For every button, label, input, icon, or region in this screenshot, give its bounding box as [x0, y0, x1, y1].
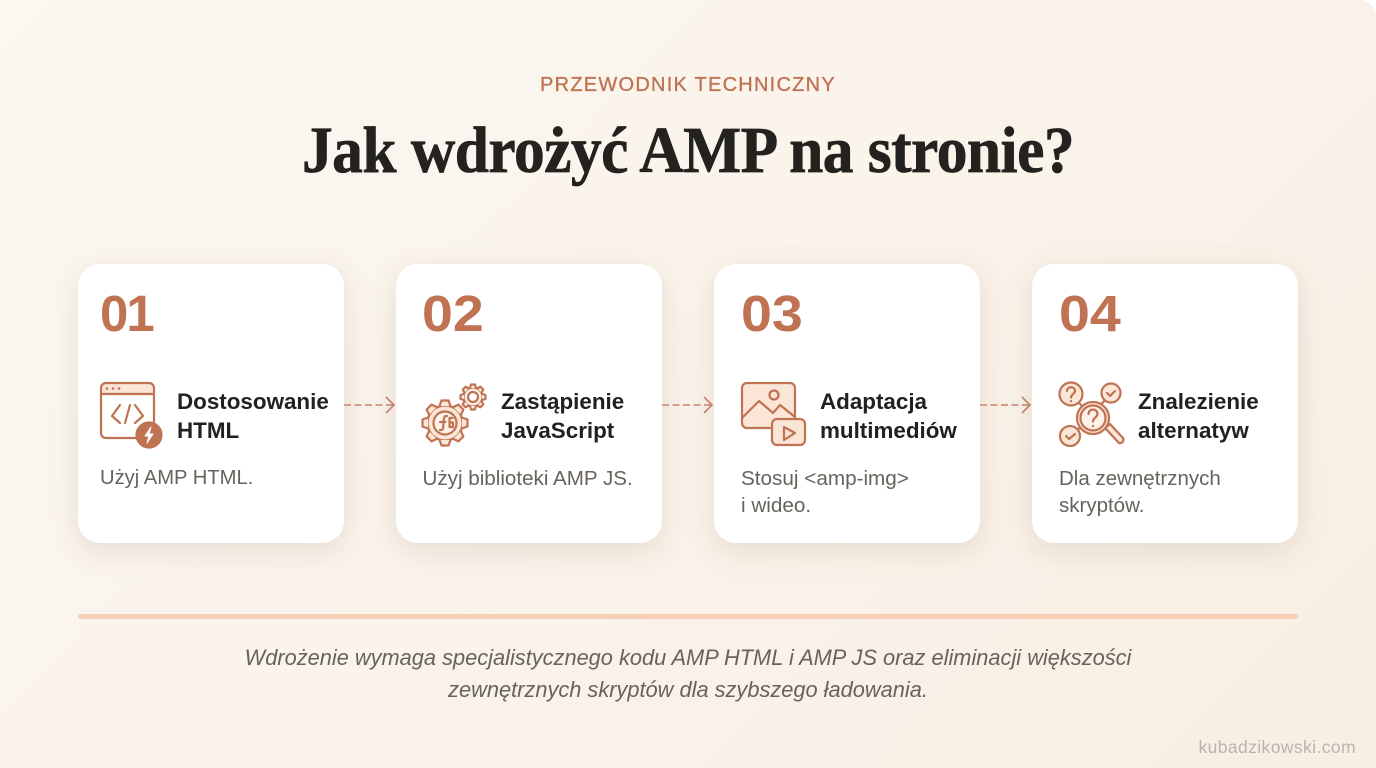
- step number 02: 02: [422, 285, 484, 342]
- watermark: kubadzikowski.com: [1198, 737, 1356, 757]
- arrow 3: [980, 396, 1031, 414]
- step heading: alternatyw: [1138, 418, 1249, 443]
- step description: skryptów.: [1059, 494, 1144, 517]
- panel: step 4: [1032, 264, 1298, 543]
- panel: step 1: [78, 264, 344, 543]
- icon: magnifier with question marks: [1058, 381, 1125, 448]
- arrow 1: [344, 396, 395, 414]
- arrow 2: [662, 396, 713, 414]
- step description: Użyj AMP HTML.: [100, 467, 253, 489]
- divider: [78, 614, 1298, 619]
- step description: Użyj biblioteki AMP JS.: [422, 467, 633, 490]
- step heading: [501, 389, 624, 443]
- step description: [1059, 467, 1221, 517]
- title: Jak wdrożyć AMP na stronie?: [302, 114, 1074, 187]
- step heading: HTML: [177, 418, 239, 443]
- step number 03: 03: [741, 285, 803, 342]
- step number 01: 01: [100, 285, 153, 342]
- step heading: [820, 389, 957, 443]
- step description: Stosuj <amp-img>: [741, 467, 909, 490]
- icon: image and video: [740, 382, 806, 446]
- step heading: JavaScript: [501, 418, 614, 443]
- step heading: Adaptacja: [820, 389, 927, 414]
- step heading: Znalezienie: [1138, 389, 1259, 414]
- step heading: Zastąpienie: [501, 389, 624, 414]
- summary text: zewnętrznych skryptów dla szybszego ładowania.: [448, 677, 928, 702]
- step description: [741, 467, 909, 517]
- summary text: [245, 645, 1132, 702]
- step description: Dla zewnętrznych: [1059, 467, 1221, 490]
- summary text: Wdrożenie wymaga specjalistycznego kodu AMP HTML i AMP JS oraz eliminacji większości: [245, 645, 1131, 670]
- step heading: [1138, 389, 1259, 443]
- step description: i wideo.: [741, 494, 811, 517]
- panel: step 2: [396, 264, 662, 543]
- icon: gears: [421, 383, 487, 447]
- step heading: Dostosowanie: [177, 389, 329, 414]
- icon: code window with bolt: [100, 382, 163, 449]
- panel: step 3: [714, 264, 980, 543]
- step number 04: 04: [1059, 285, 1121, 342]
- step heading: [177, 389, 329, 443]
- step heading: multimediów: [820, 418, 957, 443]
- eyebrow label: PRZEWODNIK TECHNICZNY: [540, 74, 836, 96]
